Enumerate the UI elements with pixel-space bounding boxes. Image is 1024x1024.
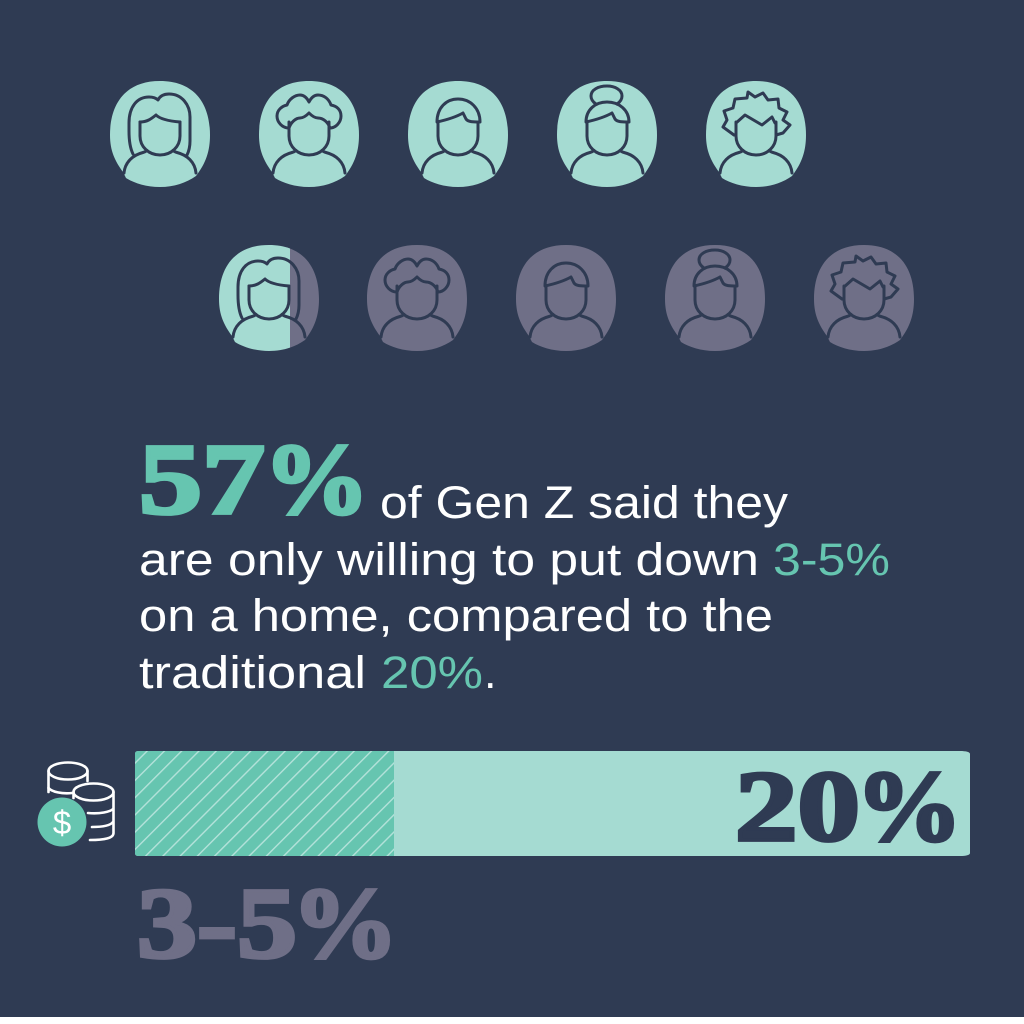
avatar: curly hair, muted <box>367 245 467 351</box>
coin <box>38 798 86 846</box>
avatar: long hair, partly filled <box>219 245 319 351</box>
body text: on a home, compared to the <box>139 590 773 641</box>
label: 3-5% <box>137 867 398 979</box>
avatar row: bottom <box>219 245 914 351</box>
label: 20% <box>735 750 962 862</box>
body text <box>139 477 890 698</box>
label: 3-5%: % <box>292 867 398 979</box>
body text: 20% <box>381 647 483 698</box>
bar: 20% track <box>135 751 970 856</box>
dollar sign: $ <box>53 804 71 841</box>
avatar row: top <box>110 81 806 187</box>
headline statistic: 57% <box>139 423 369 535</box>
body text: 3-5% <box>773 534 890 585</box>
avatar: spiky hair, muted <box>814 245 914 351</box>
headline statistic: 57%: 57 <box>139 423 265 535</box>
headline statistic: 57%: % <box>264 423 369 535</box>
label: 3-5%: 3-5 <box>137 867 297 979</box>
avatar: spiky hair <box>706 81 806 187</box>
label: 20%: 20 <box>735 750 860 862</box>
body text: are only willing to put down <box>139 534 759 585</box>
icon: coin stacks with dollar <box>38 762 114 846</box>
body text: of Gen Z said they <box>380 477 789 528</box>
bar: 3-5% hatched segment <box>135 751 394 856</box>
avatar: hair bun, muted <box>665 245 765 351</box>
avatar: short hair, muted <box>516 245 616 351</box>
label: 20%: % <box>856 750 962 862</box>
avatar: curly hair <box>259 81 359 187</box>
avatar: hair bun <box>557 81 657 187</box>
avatar: short hair <box>408 81 508 187</box>
body text: traditional <box>139 647 366 698</box>
bar chart: down payment comparison <box>135 750 970 862</box>
avatar: long hair <box>110 81 210 187</box>
body text: . <box>484 647 497 698</box>
